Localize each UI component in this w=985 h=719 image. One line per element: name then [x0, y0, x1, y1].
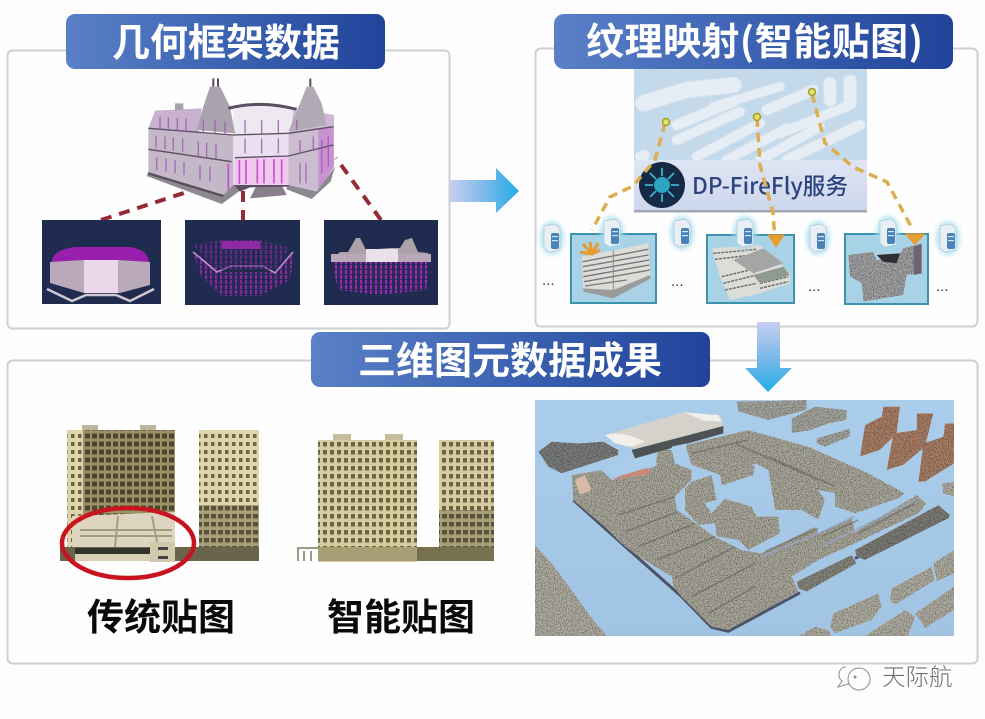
- ellipsis marks: ...: [671, 273, 684, 290]
- market hall roof: [605, 412, 723, 458]
- ellipsis marks: ...: [936, 278, 949, 295]
- pool between buildings: [603, 453, 657, 477]
- map pins: [662, 88, 816, 126]
- ellipsis marks: [542, 272, 949, 295]
- dashed connector lines: [101, 158, 381, 221]
- dashed flow arrows: [592, 94, 913, 240]
- city massing image: [634, 69, 867, 212]
- red highlight ellipse: [62, 508, 194, 578]
- panel: texture mapping: [536, 48, 978, 326]
- main district block: [572, 430, 948, 631]
- north blocks: [737, 400, 850, 447]
- title: geometry: [66, 12, 385, 69]
- database icons: [540, 216, 960, 255]
- south-west cluster: [535, 545, 607, 636]
- watermark: wechat icon: [838, 667, 870, 690]
- building tile 1: [571, 234, 656, 303]
- watermark text: 天际航: [882, 658, 952, 692]
- panel: geometry framework data: [8, 50, 450, 328]
- smart texture towers: [298, 434, 494, 562]
- title: results: 三维图元数据成果: [358, 330, 662, 385]
- building model: [147, 78, 335, 204]
- city model image: [535, 400, 954, 636]
- service logo: [639, 162, 685, 208]
- thumbnail: top view: [324, 220, 438, 305]
- arrow: right: [450, 168, 519, 213]
- thumbnail: bottom view: [185, 220, 300, 305]
- roadside strips: [797, 505, 950, 592]
- ellipsis marks: ...: [542, 272, 555, 289]
- service label: DP-FireFly服务: [692, 167, 848, 201]
- building tile 2: [707, 235, 794, 303]
- arrow: down: [745, 322, 792, 392]
- south-east blocks: [535, 482, 954, 636]
- brown towers: [860, 407, 954, 482]
- ellipsis marks: ...: [808, 278, 821, 295]
- label: traditional: 传统贴图: [87, 587, 235, 641]
- panel: results: [8, 360, 978, 664]
- building tile 3: [845, 234, 928, 304]
- thumbnail: front view: [42, 220, 161, 304]
- title: geometry: 几何框架数据: [112, 12, 340, 67]
- traditional texture towers: [60, 425, 259, 562]
- title: texture mapping: 纹理映射(智能贴图): [586, 11, 923, 66]
- arrowheads: [580, 235, 922, 254]
- label: smart: 智能贴图: [327, 587, 475, 641]
- west terminal: [538, 442, 618, 473]
